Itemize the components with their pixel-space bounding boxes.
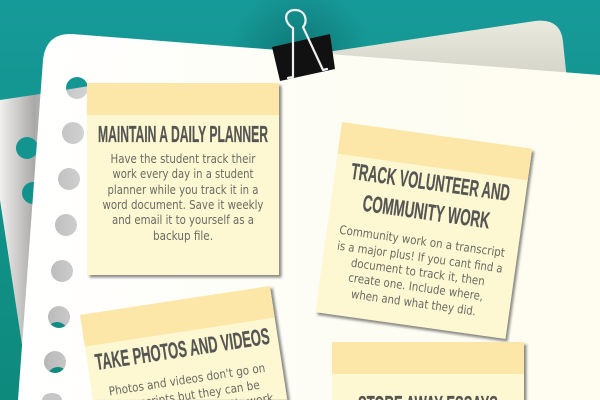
body text: backup file. — [153, 229, 213, 243]
back paper: right — [300, 21, 568, 90]
hole at the bottom of the paper — [42, 393, 62, 400]
body text: is a major plus! If you cant find a — [336, 239, 504, 276]
body text: planner while you track it in a — [108, 183, 258, 197]
body text: Community work on a transcript — [339, 223, 506, 260]
heading — [345, 158, 512, 236]
sticky note: maintain a daily planner — [87, 83, 279, 275]
body text — [330, 223, 506, 321]
body text: work every day in a student — [112, 167, 254, 181]
body text: Photos and videos don't go on — [108, 361, 266, 398]
sticky note: take photos and videos — [80, 286, 288, 400]
back paper: left — [0, 68, 200, 400]
body text: when and what they did. — [350, 287, 477, 318]
body text: and email it to yourself as a — [112, 213, 254, 227]
heading: TAKE PHOTOS AND VIDEOS — [93, 323, 271, 375]
sticky note: store away essays — [332, 342, 524, 400]
clip shadow on background — [230, 0, 370, 125]
sticky note: track volunteer and community work — [315, 122, 532, 339]
body text: create one. Include where, — [347, 270, 484, 303]
body text: document to track it, then — [350, 256, 486, 288]
heading: COMMUNITY WORK — [361, 190, 492, 233]
body text — [102, 152, 264, 243]
icon: binder clip — [272, 10, 335, 81]
body text: word document. Save it weekly — [102, 198, 264, 212]
body text: Have the student track their — [110, 152, 256, 166]
heading: MAINTAIN A DAILY PLANNER — [98, 121, 268, 147]
